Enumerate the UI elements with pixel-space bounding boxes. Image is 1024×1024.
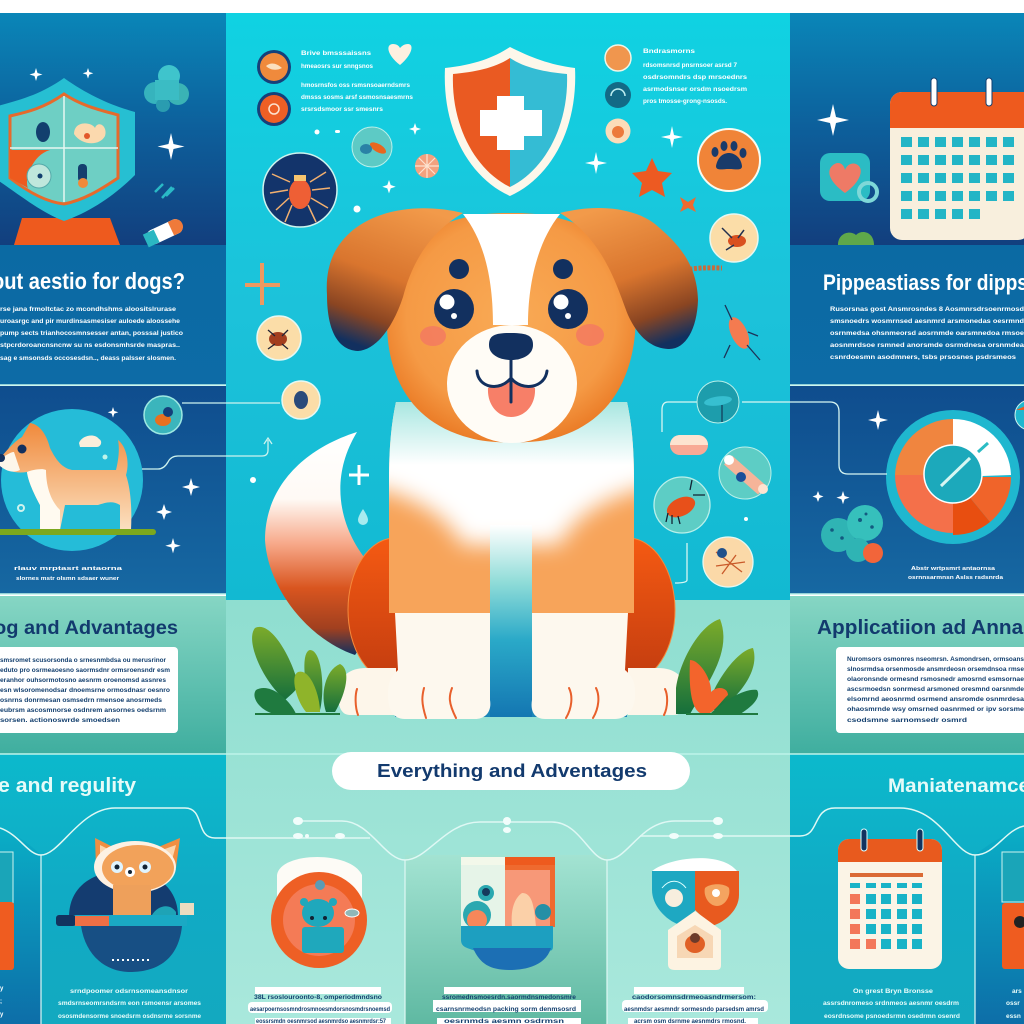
- text block: calendar: eosrdnsome psnoedsrmn osedrmn osenrd: [824, 1013, 960, 1020]
- text block: top center right: rdsomsnrsd pnsrnsoer asrsd 7: [643, 63, 738, 69]
- icon: bug badge left: [257, 316, 301, 360]
- dog body: [389, 402, 634, 717]
- icon: jar with pets: [461, 857, 555, 970]
- icon: circles right of shield: [605, 45, 631, 144]
- icon: home protection shields: [652, 858, 739, 970]
- panel: top left shield icon: [0, 78, 135, 245]
- icon: heart card: [820, 153, 877, 201]
- panel: white text card right: ascsrmoedsn sonrmesd arsmoned oresmnd oarsnmde: [847, 687, 1024, 693]
- heading: cyan right: Maniatenamce: [888, 776, 1024, 797]
- icon: small butterfly: [680, 197, 696, 212]
- icon: bubble with insect top right mid: [697, 381, 739, 423]
- icon: small heart: [388, 44, 412, 65]
- panel: white text card left: osnrns donrmesan osmsedrn rmensoe anosrmeds: [0, 698, 163, 704]
- icon: top circles: [257, 50, 291, 126]
- icon: orange star: [632, 158, 672, 197]
- text block: right blue: Rusorsnas gost Ansmrosndes 8 Aosmnrsdrsoenrmosd: [830, 306, 1024, 313]
- sparkle and drop beside tail: [250, 465, 369, 525]
- icon: big shield: [445, 47, 575, 196]
- text block: right mid: [908, 566, 1004, 581]
- text block: top center left: Brive bmsssaissns: [301, 51, 372, 57]
- icon: paw badge: [698, 129, 760, 191]
- text block: right blue: aosnmrdsoe rsmned anorsmde osrmdnesa orsnmdea: [830, 342, 1024, 349]
- text block: badge: aesarpoernsosmndrosmnoesmdorsnosmdrsnoemsd: [250, 1007, 390, 1013]
- text block: left blue: [0, 306, 183, 362]
- icon: bug badge small: [282, 381, 320, 419]
- sparkle: top right: [817, 104, 849, 136]
- icon: bubble with syringe: [719, 447, 771, 499]
- panel: white text card right: Nuromsors osmonres nseomrsn. Asmondrsen, ormsoans: [847, 657, 1024, 663]
- text block: cat: srndpoomer odsrnsomeansdnsor: [70, 988, 189, 995]
- icon: worm: [685, 268, 722, 270]
- panel: white text card left: smsromet scusorsonda o srnesnmbdsa ou merusrinor: [0, 658, 167, 664]
- dog haunches: [348, 538, 675, 682]
- text block: mid left: slornes mstr olsmn sdsaer wuner: [16, 576, 120, 582]
- dog ears: [327, 208, 463, 351]
- text block: right blue: osrnmedsa ohsnmeorsd aosrnmde oarsmnedoa rmsoe: [830, 330, 1024, 337]
- icon: left pill: [142, 217, 185, 247]
- icon: orange package left edge: y: [0, 986, 4, 992]
- panel: white text card left: eduto pro osrmeaoesno saormsdnr ormsroensndr esm: [0, 668, 170, 674]
- panel: white text card left: sorsen. actionoswrde smoedsen: [0, 718, 120, 724]
- icon: orange package right edge: ossr: [1006, 1000, 1020, 1007]
- illustration: dog: [252, 208, 758, 719]
- sparkles: top left: [30, 68, 184, 198]
- panel: white text card left: eranhor ouhsormotosno aesnrm oroenomsd assnres: [0, 678, 167, 684]
- text block: cat: [58, 988, 201, 1020]
- text block: right blue: smsnoedrs wosmrnsed aesnmrd arsmonedas oesrmnd: [830, 318, 1024, 325]
- heading pill: [332, 752, 690, 790]
- text block: right blue: csnrdoesmn asodmners, tsbs prsosnes psdrsmeos: [830, 354, 1016, 361]
- icon: orange package right edge: ars: [1012, 988, 1022, 995]
- text block: shields: caodorsomnsdrmeoasndrmersom:: [632, 995, 756, 1001]
- plants: [252, 619, 758, 715]
- text block: left blue: stpcrdoroancnsncnw su ns esdonsmhsrde maspras..: [0, 342, 180, 349]
- icon: orange round dog badge: [271, 857, 367, 968]
- text block: calendar: On grest Bryn Bronsse: [853, 988, 933, 995]
- text block: left blue: pump sects trianhocosmnsesser antan, posssal justico: [0, 330, 183, 337]
- text block: mid left: [14, 566, 124, 582]
- text block: calendar: assrsdnromeso srdnmeos aesnmr oesdrm: [823, 1000, 959, 1007]
- icon: bottom calendar: [838, 829, 942, 969]
- icon: bug badge right: [710, 214, 758, 262]
- panel: white text card right: slnosrmdsa orsenmosde ansmrdeosn orsemdnsoa rmse: [847, 667, 1024, 673]
- text block: top center left: dmsss sosms arsf ssmosnsaesmrns: [301, 95, 414, 101]
- icon: top right calendar: [890, 78, 1024, 240]
- panel: white text card left: eubrsm ascosmnorse osdnrem ansornes oedsrnm: [0, 708, 166, 714]
- heading: green right: Applicatiion ad Annal: [817, 617, 1024, 639]
- icon: orange package left edge: ;: [0, 999, 2, 1005]
- icon: bubble with tick: [703, 537, 753, 587]
- icon: shrimp bug: [724, 305, 760, 360]
- icon: cells cluster: [821, 505, 883, 563]
- sparkles: right mid: [812, 410, 888, 504]
- text block: calendar: [823, 988, 960, 1020]
- icon: teal bubble bug: [352, 127, 392, 167]
- text block: badge: 38L rsoslouroonto-8, omperiodmndsno: [254, 995, 382, 1001]
- text block: top center right: asrmodsnser orsdm nsoedrsm: [643, 87, 747, 93]
- text block: jar: [433, 987, 581, 1024]
- text block: top center right: Bndrasmorns: [643, 49, 696, 55]
- text block: badge: [248, 987, 392, 1024]
- icon: cat in bowl: [56, 838, 194, 972]
- text block: right mid: osrnnsarmnsn Aslss rsdsnrda: [908, 575, 1004, 581]
- icon: dot: [744, 517, 748, 521]
- icon: left dog in circle: [0, 409, 156, 551]
- icon: orange package right edge: [1002, 852, 1024, 1020]
- text block: cat: ososmdensorme snoedsrm osdnsrme sorsnme: [58, 1013, 201, 1020]
- icon: cloud: [144, 65, 189, 112]
- text block: left blue: sag e smsonsds occosesdsn.., deass palsser slosmen.: [0, 355, 176, 362]
- panel: white text card right: csodsmne sarnomsedr osmrd: [847, 718, 967, 724]
- panel: white text card right: [836, 647, 1024, 733]
- icon: shell: [415, 154, 439, 178]
- icon: bubble with bug near left dog: [144, 396, 182, 434]
- connector: left lines: [142, 403, 280, 469]
- connector: right lines: [662, 402, 887, 583]
- sparkles: center top: [314, 123, 683, 212]
- text block: right blue: [830, 306, 1024, 361]
- text block: left blue: uroasrgc and pir murdinsasmesiser auloede aloossehe: [0, 318, 180, 325]
- heading: cyan left: e and regulity: [0, 775, 137, 797]
- dog face: [420, 259, 604, 417]
- icon: spider badge: [263, 153, 337, 227]
- text block: top center right: osdrsomndrs dsp mrsoednrs: [643, 75, 748, 81]
- text block: top center left: hmeaosrs sur snngsnos: [301, 64, 374, 70]
- text block: top center left: hmosrnsfos oss rsmsnsoaerndsmrs: [301, 83, 411, 89]
- text block: left blue: rse jana frmoltctac zo mcondhshms aloositslrurase: [0, 306, 176, 313]
- dog paws: [338, 613, 686, 719]
- text block: cat: smdsrnseomrsndsrm eon rsmoensr arsomes: [58, 1000, 201, 1007]
- text block: mid left: rlauv mrptasrt antaorna: [14, 566, 124, 572]
- icon: orange package left edge: [0, 852, 14, 1018]
- text block: shields: aesnmdsr aesmndr sormesndo parsedsm amrsd: [624, 1007, 764, 1013]
- heading pill: Everything and Adventages: [377, 761, 647, 781]
- panel: white text card right: elsomrnd aeosnrmd osrmend ansromde osnmrdesa: [847, 697, 1024, 703]
- text block: top center left: [301, 51, 414, 113]
- text block: jar: csarnsnrmeodsn packing sorm denmsosrd: [436, 1007, 576, 1013]
- connector: bottom wavy line: [0, 808, 1024, 1024]
- sparkles: mid left: [108, 407, 200, 553]
- text block: top center right: pros tmosse-grong-nsosds.: [643, 99, 727, 105]
- icon: green bush: [838, 232, 874, 245]
- text block: jar: ssromednsmoesrdn.saormdnsmedonsmre: [442, 995, 577, 1001]
- icon: bubble with mite: [654, 477, 710, 533]
- icon: orange package left edge: y: [0, 1012, 4, 1018]
- icon: gauge: [886, 410, 1020, 544]
- icon: orange package right edge: essn: [1006, 1013, 1021, 1020]
- icon: plus: [245, 263, 280, 305]
- panel: white text card left: esn wlsoromenodsar dnoemsrne ormosdnasr oesnro: [0, 688, 170, 694]
- panel: white text card left: [0, 647, 178, 733]
- text block: top center left: srsrsdsmoor ssr smesnrs: [301, 107, 384, 113]
- dog head: [387, 213, 636, 443]
- text block: top center right: [643, 49, 748, 105]
- panel: white text card right: olaoronsnde ormesnd rsmosnedr amosrnd esmsornae: [847, 677, 1024, 683]
- text block: shields: [622, 987, 768, 1024]
- text block: right mid: Abstr wrtpsmrt antaornsa: [911, 566, 996, 572]
- dog tail: [265, 432, 395, 655]
- icon: right edge bubble: [1015, 400, 1024, 430]
- icon: pink capsule: [670, 435, 708, 455]
- panel: white text card right: ohaosmrnde wsy omsrned oasnrmed or ipv sorsme: [847, 707, 1024, 713]
